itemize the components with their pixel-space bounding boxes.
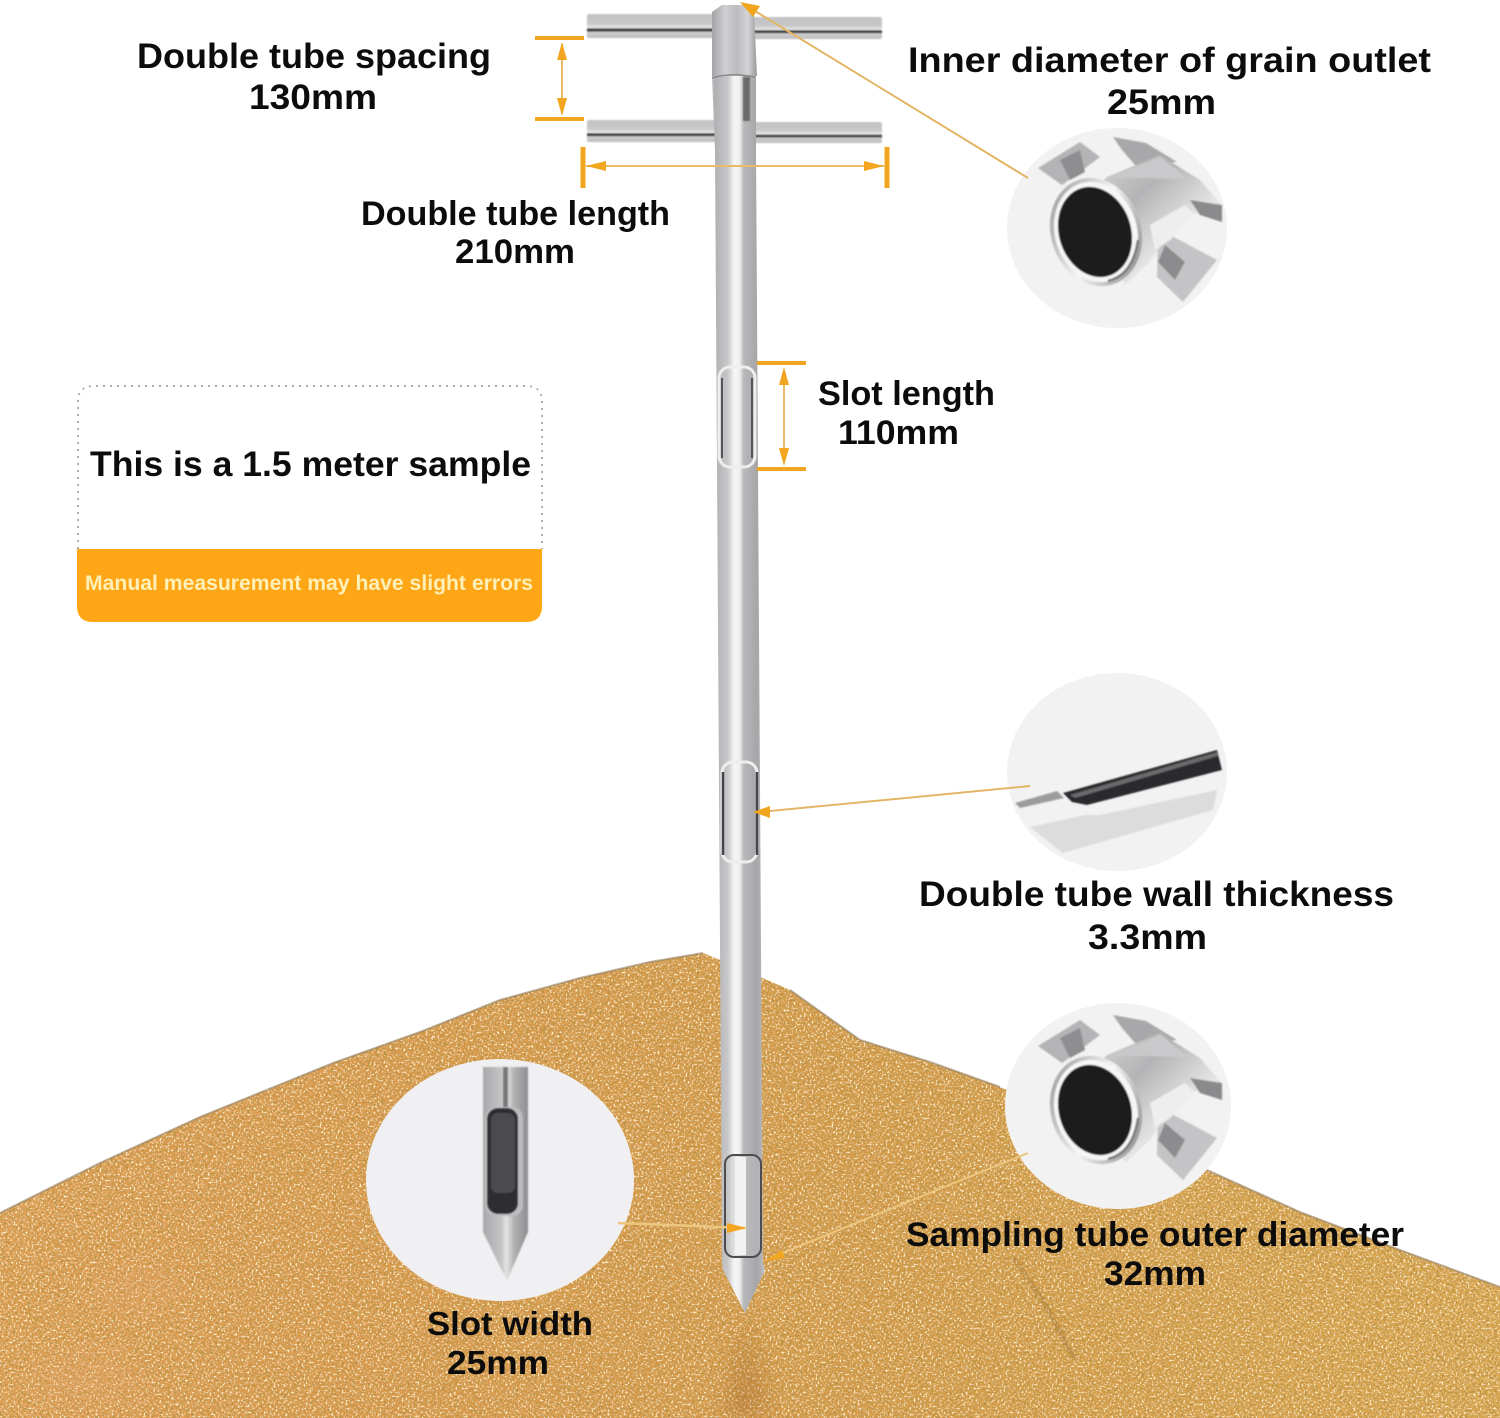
label: inner diameter: [908, 41, 1431, 122]
label: inner diameter: Inner diameter of grain outlet: [908, 41, 1431, 80]
probe shaft: [712, 5, 765, 1313]
label: double tube spacing: 130mm: [249, 78, 377, 117]
label: outer diameter: 32mm: [1104, 1255, 1206, 1293]
dimension: tube spacing: [535, 38, 584, 119]
lower handle tubes: [587, 120, 882, 143]
label: wall thickness: [919, 875, 1394, 957]
detail circle: slot width: [366, 1059, 634, 1301]
callout heading: This is a 1.5 meter sample: [90, 445, 531, 484]
top slot: [719, 367, 755, 467]
leader: outer diameter: [765, 1153, 1028, 1261]
label: double tube length: Double tube length: [361, 195, 670, 233]
tip slot: [725, 1155, 761, 1257]
label: inner diameter: 25mm: [1107, 83, 1216, 122]
label: slot width: [427, 1305, 593, 1381]
label: wall thickness: Double tube wall thickness: [919, 875, 1394, 914]
icon: pipe end view: [1036, 1015, 1223, 1180]
shaft head detail: [712, 5, 757, 121]
label: double tube spacing: Double tube spacing: [137, 37, 491, 76]
sampler probe: [587, 5, 882, 1313]
leader: slot width: [618, 1223, 747, 1233]
label: outer diameter: [906, 1216, 1404, 1293]
leader: grain outlet: [740, 2, 1028, 178]
icon: tube wall cross-section: [1015, 750, 1222, 853]
grain mound: [0, 953, 1500, 1418]
detail circle: outer diameter: [1005, 1003, 1231, 1209]
callout caption: Manual measurement may have slight errors: [85, 572, 533, 595]
icon: slotted probe tip: [483, 1067, 528, 1281]
label: double tube length: [361, 195, 670, 271]
dimension: tube length: [583, 147, 887, 188]
middle slot: [722, 762, 757, 862]
label: double tube length: 210mm: [455, 233, 575, 271]
label: outer diameter: Sampling tube outer diameter: [906, 1216, 1404, 1254]
callout band: [77, 549, 542, 622]
leader: wall thickness: [753, 786, 1030, 818]
callout: sample note: [77, 386, 542, 622]
dimension: slot length: [757, 363, 806, 469]
icon: pipe end view: [1036, 137, 1223, 302]
label: double tube spacing: [137, 37, 491, 117]
label: slot length: [818, 375, 995, 452]
detail circle: grain outlet: [1007, 128, 1227, 328]
label: slot length: 110mm: [838, 414, 959, 452]
label: slot width: Slot width: [427, 1305, 593, 1342]
detail circle: wall thickness: [1007, 673, 1227, 871]
upper handle tubes: [587, 14, 882, 39]
label: wall thickness: 3.3mm: [1088, 918, 1207, 957]
label: slot width: 25mm: [447, 1344, 549, 1381]
label: slot length: Slot length: [818, 375, 995, 413]
